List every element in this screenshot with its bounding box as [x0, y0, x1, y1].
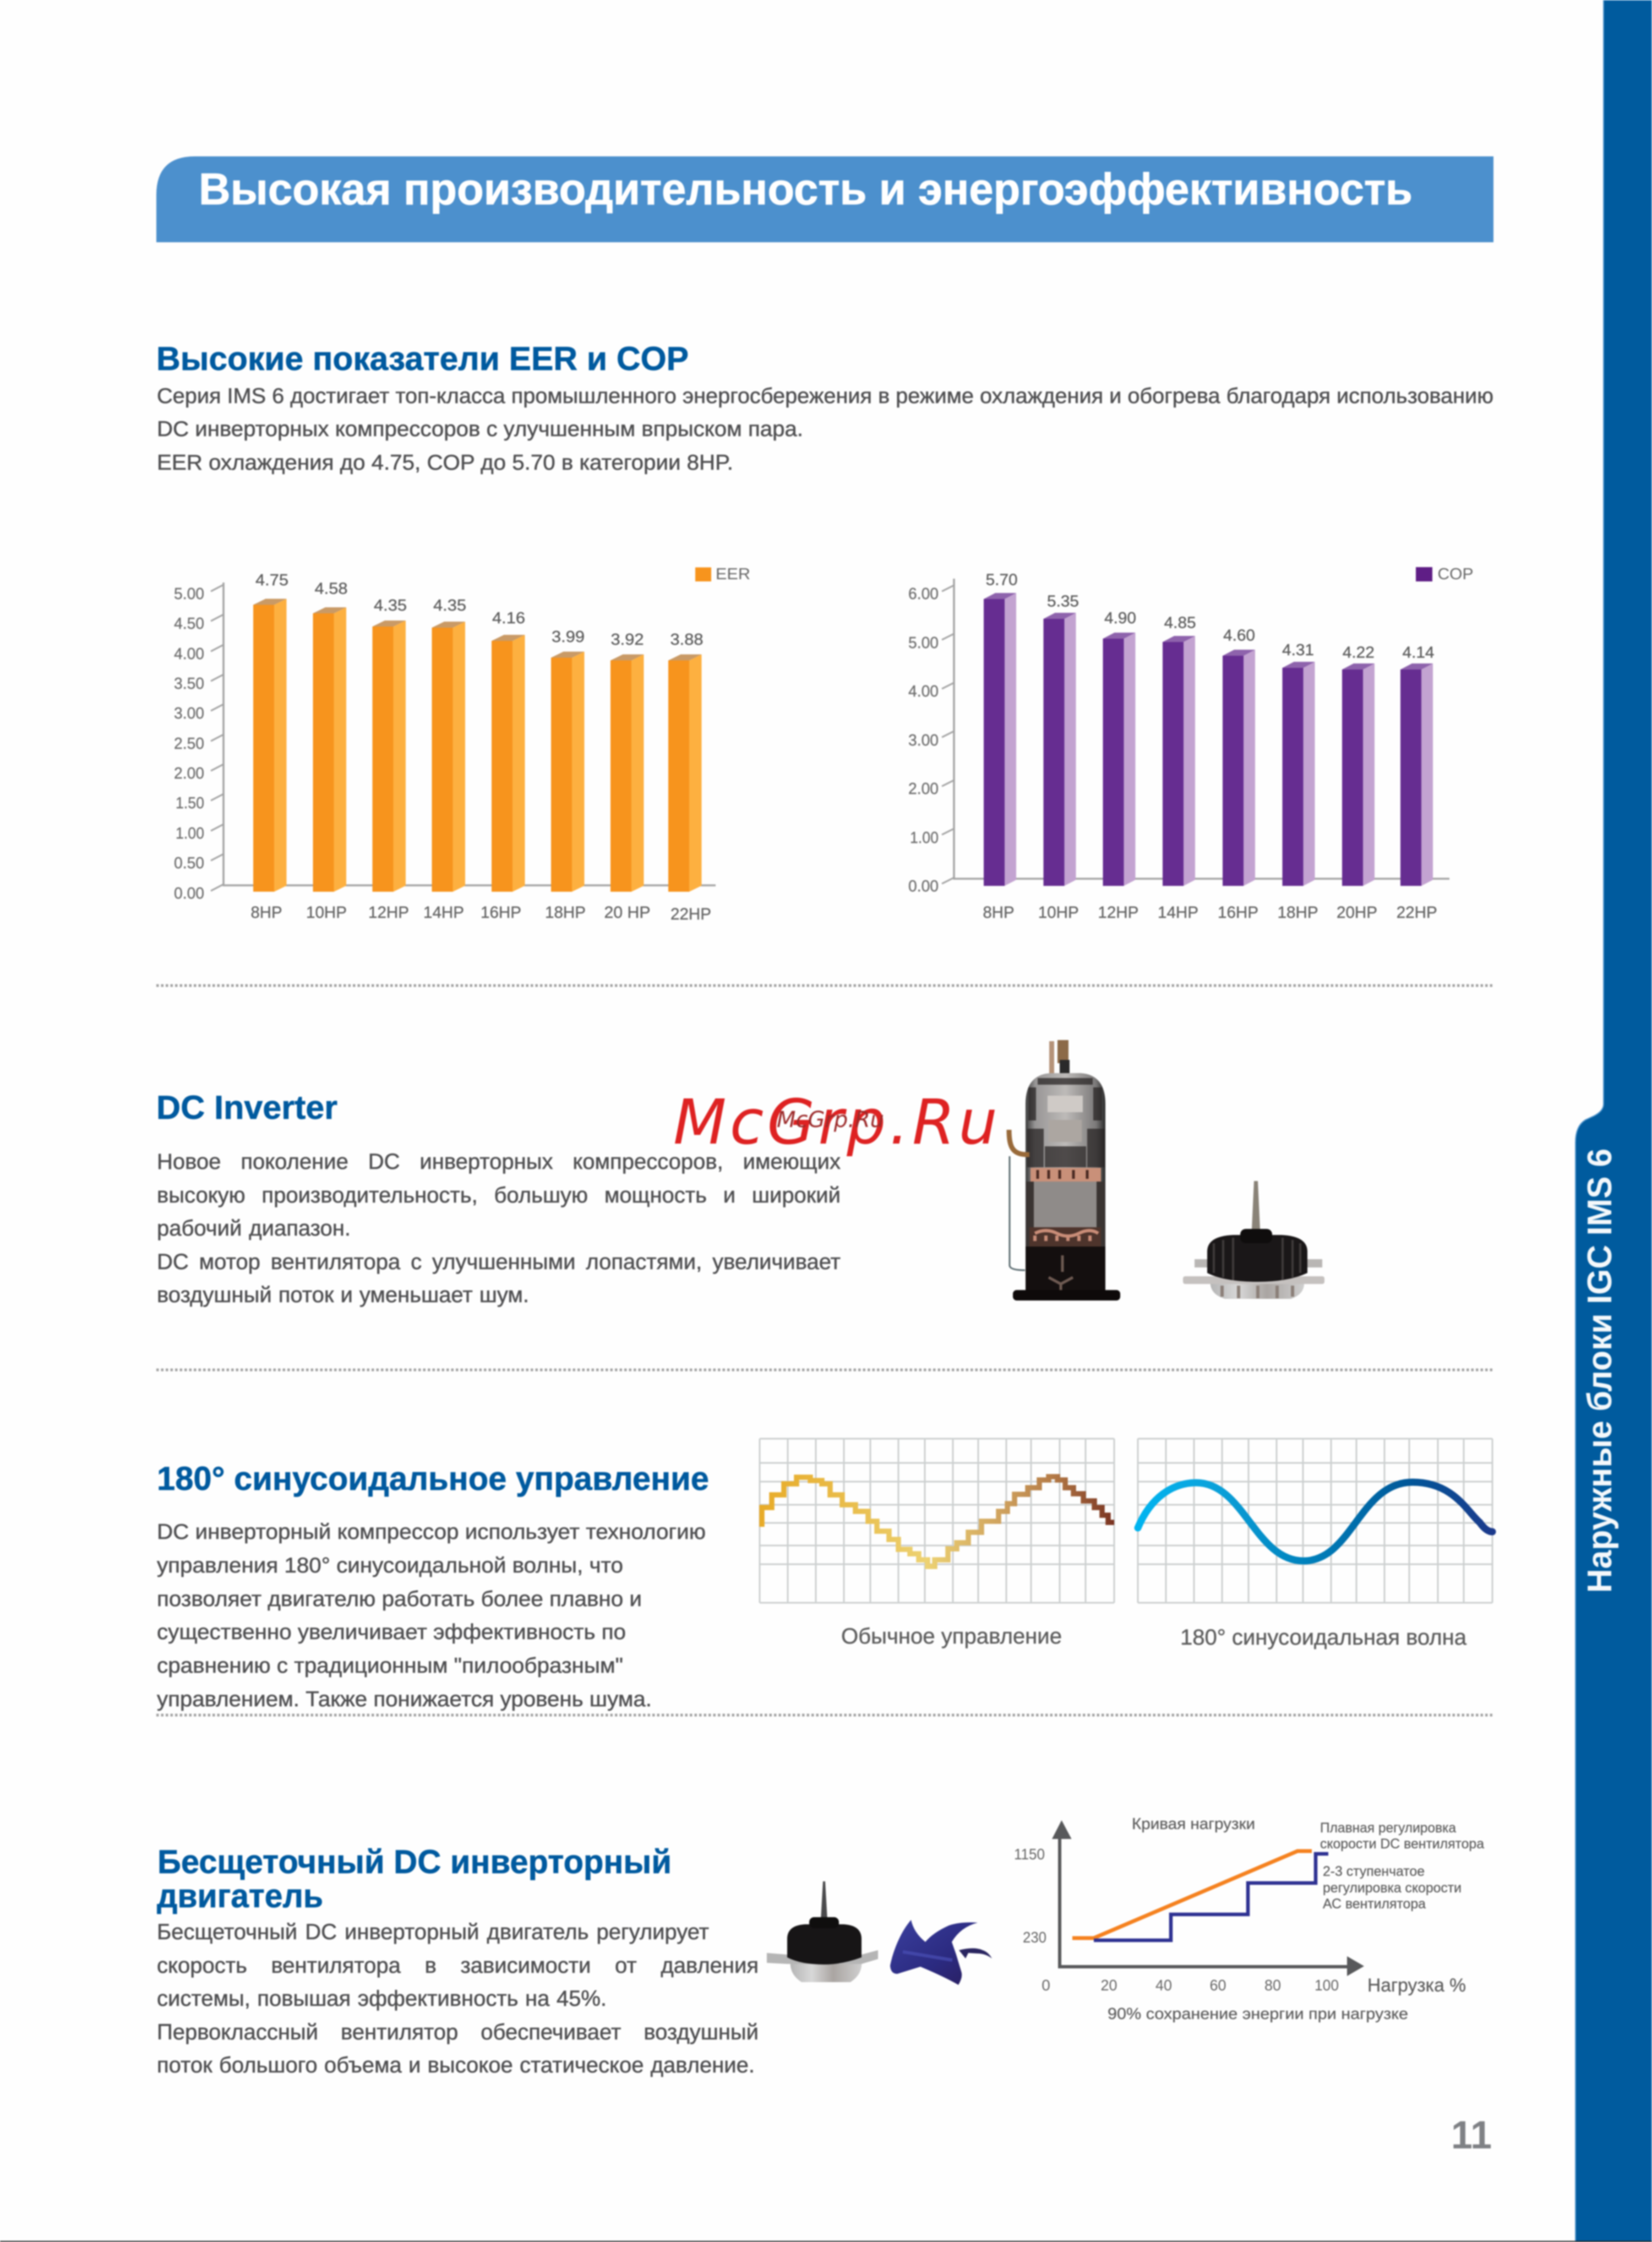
watermark: McGrp.Ru — [673, 1087, 997, 1158]
x-axis values: 0 — [1042, 1977, 1050, 1994]
icon: fan blade — [890, 1920, 992, 1985]
EER bar 10HP: 10HP — [306, 904, 347, 922]
chart axes with arrows — [1052, 1820, 1364, 1976]
EER bar 10HP — [306, 580, 348, 922]
EER bar 8HP: 8HP — [251, 904, 282, 922]
heading: EER and COP: Высокие показатели EER и COP — [156, 340, 689, 377]
COP bar 20HP — [1337, 644, 1377, 922]
EER y-axis labels: 0.00 — [174, 885, 204, 902]
bar chart: EER — [174, 565, 750, 923]
EER bar 16HP: 16HP — [481, 904, 521, 922]
EER bar 12HP — [368, 597, 409, 922]
COP bar 10HP: 10HP — [1038, 904, 1079, 922]
paragraph: brushless motor: скорость вентилятора в зависимости от давления — [157, 1953, 759, 1978]
chart: smooth sine wave — [1138, 1439, 1492, 1650]
EER legend: EER — [716, 565, 750, 583]
paragraph: sine control: сравнению с традиционным "пилообразным" — [157, 1654, 623, 1678]
paragraph: brushless motor — [156, 1920, 759, 2078]
COP bar 8HP: 5.70 — [986, 572, 1018, 589]
EER bar 8HP: 4.75 — [255, 572, 288, 589]
paragraph: DC inverter: рабочий диапазон. — [157, 1216, 351, 1240]
EER y-axis labels: 3.00 — [174, 705, 204, 722]
EER y-axis labels: 5.00 — [174, 585, 204, 603]
side tab label: Наружные блоки IGC IMS 6 — [1581, 1149, 1619, 1593]
EER bar 22HP: 22HP — [670, 905, 711, 923]
section: EER and COP intro — [156, 340, 1493, 475]
COP y-axis labels: 0.00 — [908, 878, 939, 895]
annotation: DC fan smooth control: скорости DC вентилятора — [1320, 1836, 1484, 1852]
x-axis title: Нагрузка % — [1367, 1975, 1466, 1996]
paragraph: brushless motor: системы, повышая эффективность на 45%. — [157, 1987, 607, 2011]
EER bar 12HP: 12HP — [368, 904, 409, 922]
EER bar 22HP — [668, 631, 711, 923]
COP bar 10HP — [1038, 592, 1079, 922]
EER y-axis labels: 2.50 — [174, 735, 204, 753]
paragraph: DC inverter: DC мотор вентилятора с улучшенными лопастями, увеличивает — [157, 1250, 841, 1274]
EER bar 20HP — [604, 631, 651, 922]
COP bar 12HP: 4.90 — [1104, 610, 1136, 627]
EER y-axis labels: 1.00 — [176, 825, 204, 842]
EER y-axis labels: 4.00 — [174, 645, 204, 663]
COP bar 18HP: 4.31 — [1282, 641, 1314, 659]
heading: 180 degree sine control: 180° синусоидальное управление — [157, 1460, 709, 1497]
paragraph: DC inverter: Новое поколение DC инверторных компрессоров, имеющих — [157, 1150, 841, 1174]
intro paragraph — [157, 384, 1493, 475]
paragraph: sine control: существенно увеличивает эффективность по — [157, 1620, 626, 1644]
annotation: DC fan smooth control: Плавная регулировка — [1320, 1820, 1456, 1836]
y-axis values: 230 — [1023, 1929, 1046, 1946]
paragraph: brushless motor: Первоклассный вентилятор обеспечивает воздушный — [157, 2020, 759, 2044]
COP bar 22HP: 22HP — [1397, 904, 1437, 922]
COP y-axis labels: 6.00 — [908, 585, 939, 603]
icon: cutaway compressor — [1009, 1040, 1120, 1300]
EER legend — [695, 565, 750, 583]
x-axis values — [1042, 1977, 1339, 1994]
COP y-axis labels: 2.00 — [908, 780, 939, 798]
intro paragraph: EER охлаждения до 4.75, COP до 5.70 в категории 8HP. — [157, 451, 733, 475]
EER bar 14HP: 4.35 — [433, 597, 466, 614]
EER bar 18HP: 18HP — [545, 904, 586, 922]
COP bar 20HP: 20HP — [1337, 904, 1377, 922]
x-axis values: 40 — [1155, 1977, 1172, 1994]
x-axis values: 100 — [1315, 1977, 1339, 1994]
COP legend: COP — [1438, 565, 1473, 583]
page number: 11 — [1451, 2114, 1492, 2157]
caption: conventional control: Обычное управление — [841, 1624, 1062, 1648]
COP bar 12HP: 12HP — [1098, 904, 1138, 922]
annotation: DC fan smooth control — [1320, 1820, 1484, 1852]
EER y-axis labels: 0.50 — [174, 855, 204, 872]
y-axis values: 1150 — [1014, 1846, 1045, 1863]
EER y-axis labels — [174, 585, 204, 902]
paragraph: sine control: позволяет двигателю работать более плавно и — [157, 1587, 642, 1611]
COP y-axis labels — [908, 585, 939, 895]
paragraph: sine control: управлением. Также понижается уровень шума. — [157, 1688, 652, 1711]
COP bar 18HP — [1278, 641, 1318, 922]
COP bar 20HP: 4.22 — [1343, 644, 1375, 662]
COP bar 14HP: 14HP — [1158, 904, 1198, 922]
annotation: AC fan stepped control: АС вентилятора — [1323, 1896, 1426, 1912]
x-axis values: 80 — [1264, 1977, 1281, 1994]
title banner — [156, 156, 1493, 242]
EER bar 20HP: 3.92 — [611, 631, 644, 649]
COP chart axes and ticks — [942, 579, 1449, 884]
intro paragraph: Серия IMS 6 достигает топ-класса промышленного энергосбережения в режиме охлаждения и обогрева благодаря использованию — [157, 384, 1493, 408]
EER bar 18HP: 3.99 — [552, 628, 585, 646]
watermark: McGrp.Ru — [777, 1107, 884, 1133]
orange DC curve — [1072, 1851, 1312, 1938]
EER bar 22HP: 3.88 — [670, 631, 704, 649]
EER bar 14HP — [423, 597, 466, 922]
paragraph: DC inverter — [157, 1150, 841, 1308]
title text: Высокая производительность и энергоэффективность — [199, 165, 1413, 214]
caption: 180 sine wave: 180° синусоидальная волна — [1180, 1625, 1467, 1650]
EER bar 14HP: 14HP — [423, 904, 464, 922]
x-axis values: 20 — [1101, 1977, 1117, 1994]
paragraph: sine control — [157, 1520, 706, 1711]
COP bar 16HP: 4.60 — [1223, 627, 1255, 644]
EER y-axis labels: 2.00 — [174, 765, 204, 782]
intro paragraph: DC инверторных компрессоров с улучшенным впрыском пара. — [157, 417, 803, 441]
EER bar 10HP: 4.58 — [315, 580, 348, 598]
chart: stepped waveform — [760, 1439, 1114, 1648]
annotation: AC fan stepped control: 2-3 ступенчатое — [1323, 1864, 1425, 1879]
EER y-axis labels: 1.50 — [176, 795, 204, 812]
EER chart axes and ticks — [211, 583, 716, 891]
paragraph: brushless motor: Бесщеточный DC инверторный двигатель регулирует — [157, 1920, 709, 1944]
annotation: AC fan stepped control: регулировка скорости — [1323, 1880, 1462, 1896]
COP legend — [1416, 565, 1473, 583]
heading: brushless DC motor: Бесщеточный DC инверторный — [157, 1843, 672, 1880]
bar chart: COP — [908, 565, 1473, 922]
EER bar 16HP — [481, 610, 525, 922]
heading: brushless DC motor: двигатель — [157, 1878, 323, 1914]
EER bar 18HP — [545, 628, 586, 922]
bottom edge line — [0, 2241, 1652, 2242]
paragraph: DC inverter: воздушный поток и уменьшает шум. — [157, 1283, 529, 1307]
blue stepped AC curve — [1094, 1854, 1328, 1940]
COP bar 8HP — [983, 572, 1018, 922]
EER y-axis labels: 4.50 — [174, 615, 204, 633]
EER bar 20HP: 20 HP — [604, 904, 651, 922]
x-axis values: 60 — [1210, 1977, 1226, 1994]
EER bar 16HP: 4.16 — [492, 610, 525, 627]
COP y-axis labels: 4.00 — [908, 683, 939, 700]
side tab: blue vertical bar — [1575, 0, 1652, 2242]
icon: brushless motor — [767, 1881, 878, 1982]
heading: DC Inverter: DC Inverter — [156, 1089, 337, 1126]
COP bar 8HP: 8HP — [983, 904, 1014, 922]
COP bar 16HP — [1218, 627, 1258, 922]
EER bar 8HP — [251, 572, 288, 922]
paragraph: sine control: DC инверторный компрессор использует технологию — [157, 1520, 706, 1544]
chart footnote: 90% сохранение энергии при нагрузке — [1108, 2005, 1408, 2023]
chart: load curve — [1014, 1815, 1484, 2023]
COP bar 16HP: 16HP — [1218, 904, 1258, 922]
COP bar 12HP — [1098, 610, 1138, 922]
EER bar 12HP: 4.35 — [374, 597, 407, 614]
COP bar 22HP — [1397, 644, 1437, 922]
COP bar 14HP: 4.85 — [1164, 614, 1196, 632]
COP bar 10HP: 5.35 — [1047, 592, 1079, 610]
COP bar 18HP: 18HP — [1278, 904, 1318, 922]
annotation: AC fan stepped control — [1323, 1864, 1462, 1912]
COP y-axis labels: 1.00 — [910, 829, 939, 847]
chart title: Кривая нагрузки — [1132, 1815, 1255, 1833]
heading: brushless DC motor — [157, 1843, 672, 1914]
y-axis values — [1014, 1846, 1046, 1946]
COP y-axis labels: 5.00 — [908, 634, 939, 652]
paragraph: brushless motor: поток большого объема и высокое статическое давление. — [157, 2053, 755, 2077]
paragraph: sine control: управления 180° синусоидальной волны, что — [157, 1554, 623, 1577]
icon: DC fan motor — [1183, 1181, 1324, 1299]
COP bar 22HP: 4.14 — [1403, 644, 1435, 662]
COP y-axis labels: 3.00 — [908, 732, 939, 749]
EER y-axis labels: 3.50 — [174, 675, 204, 693]
COP bar 14HP — [1158, 614, 1198, 922]
paragraph: DC inverter: высокую производительность, большую мощность и широкий — [157, 1183, 841, 1207]
